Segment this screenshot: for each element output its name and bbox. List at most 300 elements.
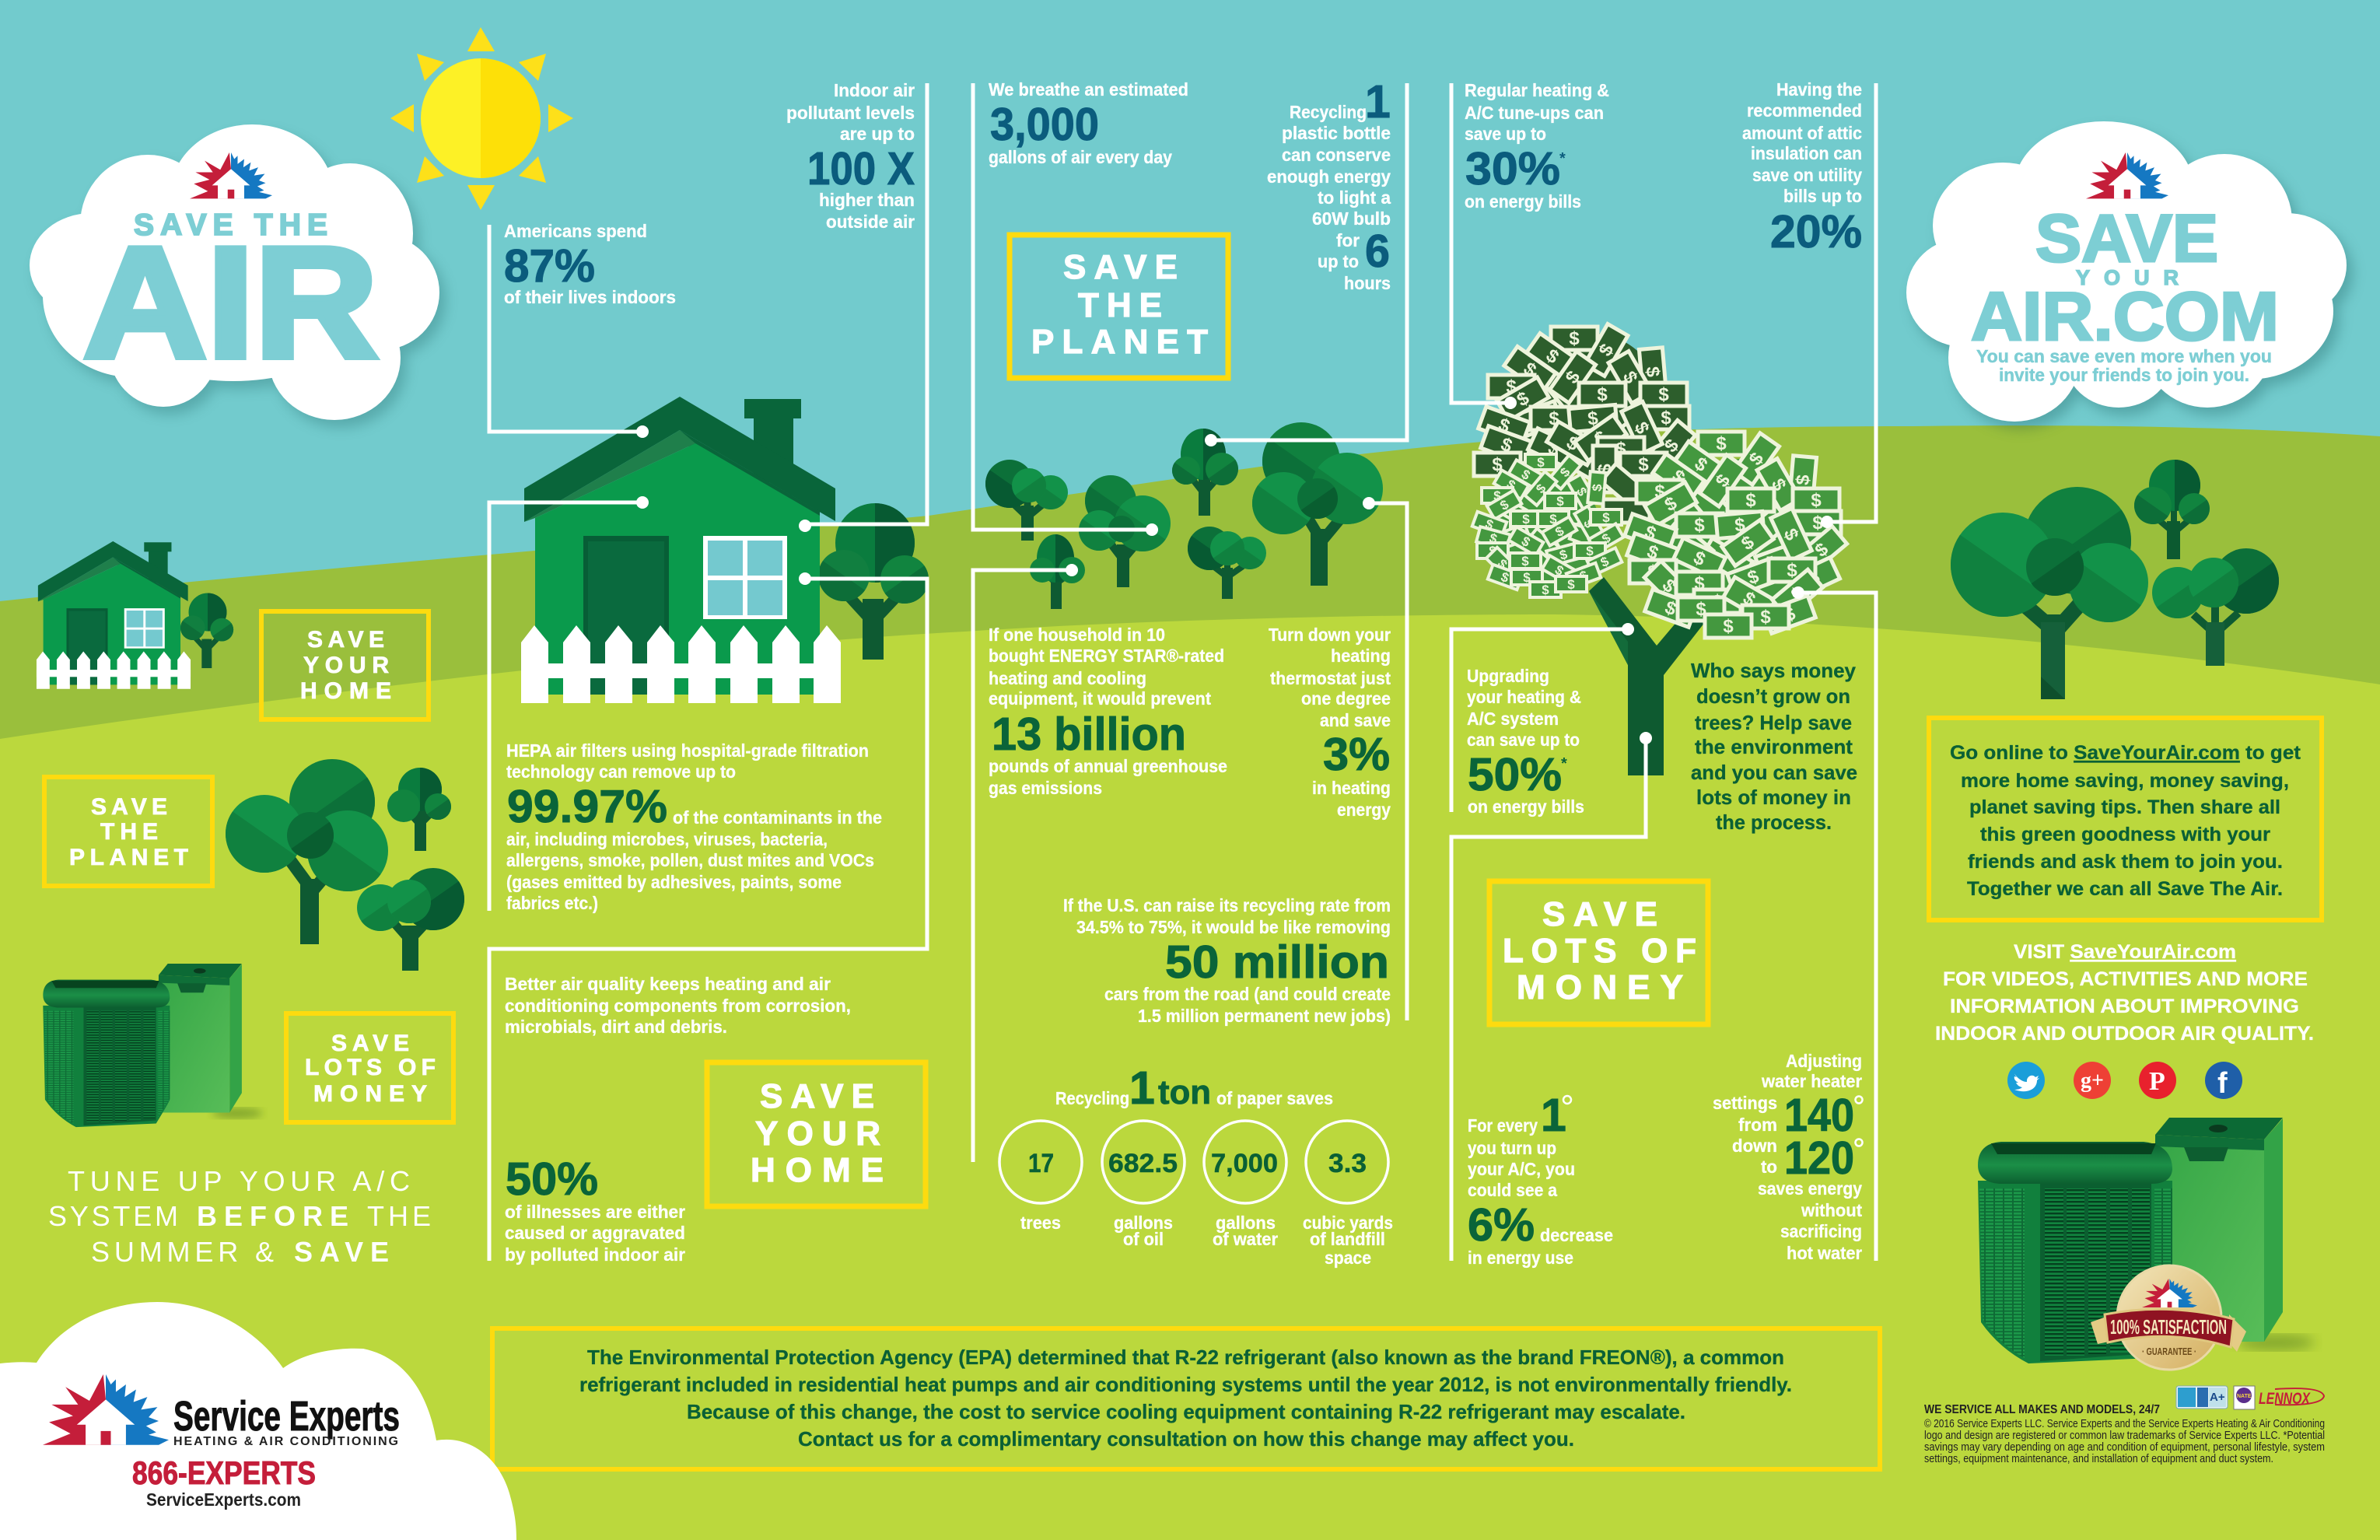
stat: tune-ups 30%: [1465, 80, 1609, 212]
box: save your home large: SAVE: [760, 1077, 874, 1115]
light bills large: $: [1760, 607, 1771, 628]
stat: recycling 50 million: 50 million: [1165, 936, 1389, 988]
stat: thermostat 3%: Turn down your: [1269, 625, 1391, 645]
box: save the planet large: THE: [1078, 286, 1162, 324]
stat: energy star 13 billion: equipment, it would prevent: [989, 688, 1211, 709]
light bills small: $: [1504, 477, 1518, 493]
tree 5: [1179, 527, 1266, 599]
stat: tune-ups 30%: on energy bills: [1465, 191, 1581, 212]
stat: recycling 1 ton of paper: [999, 1062, 1393, 1268]
stat: water heater 140 to 120: saves energy: [1758, 1178, 1862, 1199]
text: who says money: Who says money: [1691, 659, 1857, 682]
stat: hepa 99.97%: allergens, smoke, pollen, dust mites and VOCs: [506, 850, 874, 870]
stat: attic insulation 20%: 20%: [1770, 206, 1862, 257]
small house tree: [176, 593, 238, 668]
light bills small: $: [1523, 570, 1531, 585]
stat: recycling 1 bottle: Recycling: [1290, 102, 1367, 122]
stat: thermostat 3%: thermostat just: [1270, 668, 1391, 688]
text: who says money: the environment: [1695, 735, 1853, 758]
circle: landfill: cubic yards: [1303, 1213, 1393, 1233]
light bills large: $: [1690, 453, 1711, 477]
text: who says money: lots of money in: [1696, 786, 1851, 809]
light bills small: $: [1493, 488, 1501, 503]
stat: tune-ups 30%: save up to: [1465, 124, 1546, 144]
stat: thermostat 3%: in heating: [1312, 778, 1391, 798]
legal text: settings, equipment maintenance, and installation of equipment and duct system.: [1924, 1452, 2273, 1465]
light bills large: $: [1804, 566, 1824, 590]
light bills large: $: [1712, 591, 1723, 612]
stat: water heater 140 to 120: to: [1761, 1157, 1777, 1177]
lower left tree: [357, 868, 477, 971]
box: save the planet small: THE: [100, 819, 158, 845]
dark bills: $: [1661, 408, 1671, 429]
stat: 3,000 gallons: 3,000: [990, 99, 1099, 150]
light bills large: $: [1739, 587, 1759, 611]
light bills large: $: [1716, 433, 1727, 454]
box: save lots of money small: LOTS OF: [305, 1055, 436, 1080]
light bills large: $: [1712, 471, 1735, 492]
legal text: WE SERVICE ALL MAKES AND MODELS, 24/7: [1924, 1403, 2160, 1416]
light bills large: $: [1644, 541, 1661, 565]
tree 4: [1030, 534, 1085, 609]
stat: tune-ups 30%: Regular heating &: [1465, 80, 1609, 100]
epa notice box: Contact us for a complimentary consultation on how this change may affect you.: [798, 1427, 1574, 1451]
stat: tune-ups 30%: A/C tune-ups can: [1465, 103, 1604, 123]
stat: 1 degree 6%: in energy use: [1468, 1248, 1573, 1268]
text: who says money: [1691, 659, 1857, 834]
circle: landfill: space: [1325, 1248, 1371, 1268]
heading: air: AIR: [83, 215, 378, 391]
text: better air quality: microbials, dirt and debris.: [505, 1017, 727, 1037]
panel: go online: friends and ask them to join you.: [1968, 851, 2283, 873]
light bills large: [1625, 432, 1847, 638]
satisfaction guarantee seal: 100% SATISFACTION: [2110, 1315, 2227, 1339]
circle: water: [1204, 1121, 1286, 1249]
stat: recycling 1 bottle: 6: [1365, 226, 1390, 277]
tree 3: [1167, 429, 1244, 516]
heading: your: YOUR: [2076, 266, 2179, 289]
stat: water heater 140 to 120: 120: [1784, 1132, 1854, 1184]
icon: facebook: f: [2217, 1067, 2228, 1100]
box: save your home small: [261, 611, 429, 719]
right lower tree: [2152, 548, 2291, 666]
stat: 3,000 gallons: [989, 79, 1188, 167]
stat: hepa 99.97%: (gases emitted by adhesives, paints, some: [506, 872, 842, 892]
stat: americans 87%: 87%: [504, 240, 595, 292]
epa notice box: The Environmental Protection Agency (EPA) determined that R-22 refrigerant (also known as the brand FREON®), a common: [587, 1346, 1784, 1369]
panel: go online: Go online to SaveYourAir.com to get: [1950, 742, 2301, 764]
stat: recycling 1 bottle: to light a: [1318, 187, 1391, 208]
cloud: service experts logo: [0, 1302, 516, 1540]
stat: recycling 1 bottle: enough energy: [1267, 166, 1391, 187]
stat: illnesses 50%: 50%: [506, 1153, 598, 1205]
trunk: [1589, 577, 1716, 775]
stat: indoor air pollutants 100x: are up to: [840, 124, 915, 144]
icon: facebook: [2205, 1062, 2242, 1100]
stat: tune-ups 30%: *: [1559, 150, 1566, 167]
stat: 1 degree 6%: 6%: [1468, 1199, 1535, 1251]
text: better air quality: [505, 974, 851, 1037]
light bills large: $: [1745, 449, 1769, 470]
stat: thermostat 3%: and save: [1320, 710, 1391, 730]
money tree: [1472, 324, 1847, 775]
icon: pinterest: P: [2149, 1067, 2165, 1096]
light bills large: $: [1779, 525, 1803, 544]
cloud caption: [1976, 346, 2272, 385]
dark bills: $: [1658, 384, 1669, 405]
stat: upgrading 50%: Upgrading: [1467, 666, 1549, 686]
stat: 1 degree 6%: could see a: [1468, 1180, 1557, 1200]
text: visit saveyourair: INFORMATION ABOUT IMPROVING: [1950, 996, 2299, 1017]
dark bills: $: [1506, 376, 1517, 397]
light bills small: $: [1533, 481, 1549, 496]
stat: recycling 50 million: If the U.S. can raise its recycling rate from: [1063, 895, 1391, 915]
light bills large: $: [1694, 515, 1705, 536]
text: tune up your ac: SYSTEM: [48, 1200, 178, 1232]
light bills large: $: [1661, 492, 1681, 516]
dark bills: $: [1569, 328, 1580, 349]
stat: energy star 13 billion: [989, 625, 1227, 798]
cloud caption: You can save even more when you: [1976, 346, 2272, 366]
light bills large: $: [1812, 513, 1823, 534]
stat: upgrading 50%: A/C system: [1467, 709, 1559, 729]
light bills small: $: [1573, 485, 1590, 499]
box: save your home large: [707, 1062, 926, 1206]
stat: attic insulation 20%: insulation can: [1751, 143, 1862, 163]
tagline: HEATING & AIR CONDITIONING: [173, 1435, 398, 1448]
heading: [1055, 1062, 1333, 1114]
stat: indoor air pollutants 100x: outside air: [826, 212, 915, 232]
light bills large: $: [1694, 573, 1705, 594]
stat: indoor air pollutants 100x: higher than: [819, 190, 915, 210]
tree 6 large: [1240, 422, 1383, 586]
stat: attic insulation 20%: recommended: [1747, 100, 1862, 121]
stat: illnesses 50%: caused or aggravated: [505, 1223, 685, 1243]
light bills large: $: [1745, 565, 1762, 589]
front hill: [0, 614, 2380, 1540]
light bills large: $: [1734, 514, 1747, 537]
circle: trees: [999, 1121, 1082, 1233]
box: save lots of money large: LOTS OF: [1503, 932, 1696, 970]
text: tune up your ac: SAVE: [294, 1236, 389, 1268]
dark bills: $: [1562, 367, 1585, 388]
stat: energy star 13 billion: pounds of annual greenhouse: [989, 756, 1227, 776]
dark bills: $: [1492, 454, 1503, 475]
stat: 3,000 gallons: gallons of air every day: [989, 147, 1172, 167]
light bills large: $: [1657, 575, 1680, 597]
stat: recycling 1 bottle: up to: [1318, 251, 1359, 271]
dark bills: $: [1545, 437, 1563, 461]
stat: recycling 50 million: [1063, 895, 1391, 1026]
epa notice box: [492, 1328, 1880, 1469]
text: visit saveyourair: INDOOR AND OUTDOOR AIR QUALITY.: [1935, 1023, 2314, 1045]
stat: water heater 140 to 120: sacrificing: [1780, 1221, 1862, 1241]
stat: 1 degree 6%: [1468, 1090, 1613, 1268]
stat: indoor air pollutants 100x: Indoor air: [834, 80, 915, 100]
text: visit saveyourair: [1935, 941, 2314, 1045]
text: tune up your ac: TUNE UP YOUR A/C: [68, 1165, 410, 1197]
cloud shape: [0, 1302, 516, 1540]
stat: attic insulation 20%: Having the: [1776, 79, 1862, 100]
stat: recycling 1 bottle: 1: [1365, 76, 1391, 128]
box: save the planet small: SAVE: [91, 794, 167, 820]
stat: 1 degree 6%: decrease: [1540, 1225, 1613, 1245]
dark bills: $: [1498, 433, 1515, 457]
panel: go online: Together we can all Save The Air.: [1967, 878, 2283, 900]
stat: water heater 140 to 120: Adjusting: [1786, 1051, 1862, 1071]
heading: ton: [1158, 1073, 1211, 1111]
satisfaction guarantee seal: [2091, 1265, 2246, 1370]
light bills small: $: [1522, 512, 1530, 527]
satisfaction guarantee seal: · GUARANTEE ·: [2142, 1346, 2196, 1357]
text: tune up your ac: SUMMER &: [91, 1236, 274, 1268]
stat: tune-ups 30%: 30%: [1465, 143, 1560, 194]
stat: water heater 140 to 120: without: [1801, 1200, 1862, 1220]
stat: illnesses 50%: of illnesses are either: [505, 1202, 685, 1222]
stat: 1 degree 6%: you turn up: [1468, 1138, 1556, 1158]
dark bills: $: [1496, 414, 1513, 438]
stat: energy star 13 billion: If one household in 10: [989, 625, 1165, 645]
right trees group: [1930, 460, 2291, 699]
light bills small: $: [1542, 583, 1549, 597]
text: who says money: doesn’t grow on: [1696, 684, 1850, 708]
stat: thermostat 3%: 3%: [1323, 729, 1390, 780]
light bills small: $: [1483, 516, 1496, 533]
stat: energy star 13 billion: heating and cooling: [989, 668, 1146, 688]
circle: landfill: [1303, 1121, 1393, 1268]
light bills large: $: [1787, 560, 1797, 581]
icon: google plus: [2074, 1062, 2111, 1099]
text: who says money: the process.: [1716, 810, 1832, 834]
heading: save: SAVE: [2035, 201, 2218, 276]
light bills small: $: [1557, 464, 1573, 480]
dark bills: $: [1619, 368, 1642, 387]
phone: 866-EXPERTS: [132, 1454, 316, 1491]
text: better air quality: conditioning components from corrosion,: [505, 996, 851, 1016]
circle: water: of water: [1213, 1229, 1278, 1249]
cloud: save your air com: [1906, 121, 2347, 422]
box: save the planet small: PLANET: [69, 845, 188, 870]
icon: twitter: [2007, 1062, 2045, 1099]
stat: hepa 99.97%: fabrics etc.): [506, 893, 598, 913]
dark bills: $: [1594, 340, 1619, 360]
light bills small: $: [1549, 512, 1557, 527]
light bills small: $: [1519, 534, 1533, 550]
box: save the planet large: [1010, 235, 1228, 378]
heading: of paper saves: [1216, 1088, 1333, 1108]
circle: oil: 682.5: [1108, 1149, 1178, 1178]
dark bills: $: [1661, 435, 1683, 457]
stat: energy star 13 billion: gas emissions: [989, 778, 1102, 798]
stat: upgrading 50%: [1467, 666, 1584, 817]
stat: upgrading 50%: your heating &: [1467, 687, 1581, 707]
stat: hepa 99.97%: HEPA air filters using hospital-grade filtration: [506, 740, 869, 761]
light bills large: $: [1690, 547, 1709, 571]
dark bills: $: [1587, 408, 1600, 430]
box: save the planet large: SAVE: [1063, 248, 1178, 286]
circle: oil: of oil: [1123, 1229, 1164, 1249]
text: who says money: trees? Help save: [1695, 711, 1852, 734]
stat: energy star 13 billion: 13 billion: [992, 709, 1186, 760]
light bills small: $: [1488, 530, 1499, 547]
cloud: save the air: [30, 124, 439, 420]
light bills large: $: [1662, 597, 1679, 621]
stat: recycling 1 bottle: plastic bottle: [1282, 123, 1391, 143]
right small tree: [2127, 460, 2216, 559]
light bills large: $: [1668, 466, 1689, 489]
stat: americans 87%: of their lives indoors: [504, 287, 676, 307]
stat: americans 87%: Americans spend: [504, 221, 647, 241]
company name: Service Experts: [173, 1393, 400, 1440]
text: who says money: and you can save: [1691, 761, 1857, 784]
light bills small: $: [1580, 516, 1597, 531]
middle trees group: [976, 422, 1383, 609]
stat: water heater 140 to 120: down: [1732, 1136, 1777, 1156]
stat: americans 87%: [504, 221, 676, 307]
stat: energy star 13 billion: bought ENERGY STAR®-rated: [989, 646, 1224, 666]
light bills small: $: [1590, 483, 1605, 492]
stat: indoor air pollutants 100x: [786, 80, 915, 232]
stat: attic insulation 20%: [1742, 79, 1862, 257]
badge: lennox: LENNOX: [2259, 1390, 2311, 1408]
box: save your home small: SAVE: [307, 627, 384, 653]
light bills small: $: [1599, 530, 1614, 547]
dark bills: $: [1615, 439, 1626, 460]
logo mark: [43, 1374, 169, 1445]
stat: hepa 99.97%: technology can remove up to: [506, 761, 736, 782]
light bills large: $: [1738, 531, 1759, 555]
product: large ac units: [1978, 1118, 2315, 1363]
legal text: [1924, 1403, 2325, 1465]
stat: illnesses 50%: [505, 1153, 685, 1265]
dark bills: $: [1549, 408, 1559, 429]
stat: upgrading 50%: *: [1561, 755, 1567, 772]
stat: recycling 1 bottle: hours: [1344, 273, 1391, 293]
epa notice box: Because of this change, the cost to service cooling equipment containing R-22 refrigerant may escalate.: [687, 1400, 1685, 1423]
icon: sun: [390, 27, 573, 210]
box: save your home small: HOME: [300, 678, 391, 704]
stat: attic insulation 20%: bills up to: [1783, 186, 1862, 206]
social icons: [2007, 1062, 2242, 1100]
dark bills: $: [1629, 418, 1654, 438]
text: tune up your ac: [48, 1165, 431, 1268]
heading: air.com: AIR.COM: [1971, 278, 2279, 355]
badge: energy star and bbb: [2176, 1386, 2228, 1409]
box: save the planet small: [44, 777, 212, 886]
stat: thermostat 3%: energy: [1337, 800, 1391, 820]
big house building: [521, 397, 841, 703]
dark bills: $: [1519, 359, 1540, 382]
heading: Recycling: [1055, 1088, 1129, 1108]
light bills small: $: [1552, 523, 1567, 540]
left trees group: [210, 759, 477, 971]
dark bills: $: [1641, 366, 1664, 379]
dark bills: $: [1514, 387, 1533, 411]
stat: attic insulation 20%: save on utility: [1752, 165, 1862, 185]
badges: [2176, 1386, 2324, 1409]
text: tune up your ac: BEFORE: [197, 1200, 348, 1232]
box: save your home large: HOME: [751, 1151, 884, 1189]
tree 2: [1071, 475, 1171, 587]
light bills small: $: [1558, 547, 1570, 563]
connector lines and dots: [489, 83, 1876, 1261]
stat: thermostat 3%: heating: [1331, 646, 1391, 666]
badge: nate: [2234, 1386, 2255, 1409]
stat: recycling 50 million: cars from the road (and could create: [1104, 984, 1391, 1004]
cloud caption: invite your friends to join you.: [1999, 365, 2249, 385]
product: small ac units: [43, 964, 263, 1127]
circle: oil: [1102, 1121, 1185, 1249]
light bills large: $: [1647, 562, 1658, 583]
light bills small: $: [1489, 544, 1496, 558]
stat: recycling 1 bottle: [1267, 76, 1391, 293]
light bills large: $: [1767, 475, 1790, 495]
circle: trees: trees: [1020, 1213, 1061, 1233]
box: save lots of money large: [1489, 881, 1708, 1024]
dark bills: $: [1597, 384, 1608, 405]
small house: [37, 541, 191, 689]
stat: 1 degree 6%: For every: [1468, 1115, 1538, 1136]
stat: thermostat 3%: [1269, 625, 1391, 820]
legal text: savings may vary depending on age and condition of equipment, personal lifestyle, system: [1924, 1440, 2325, 1454]
heading: save the: SAVE THE: [134, 208, 327, 242]
stat: upgrading 50%: 50%: [1468, 749, 1562, 800]
logo mark: [2086, 152, 2168, 198]
stat: water heater 140 to 120: 140: [1784, 1090, 1854, 1141]
stat: water heater 140 to 120: hot water: [1787, 1243, 1862, 1263]
circle: water: 7,000: [1211, 1149, 1278, 1178]
light bills small: $: [1556, 494, 1564, 509]
circle: landfill: 3.3: [1328, 1149, 1367, 1178]
box: save lots of money large: MONEY: [1517, 968, 1683, 1006]
icon: pinterest: [2139, 1062, 2176, 1099]
stat: water heater 140 to 120: settings: [1713, 1093, 1777, 1113]
small left tree: [387, 768, 457, 851]
circle: water: gallons: [1216, 1213, 1276, 1233]
light bills large: $: [1642, 521, 1659, 545]
text: visit saveyourair: VISIT SaveYourAir.com: [2014, 941, 2236, 963]
light bills small: $: [1521, 554, 1529, 569]
stat: recycling 1 bottle: can conserve: [1282, 145, 1391, 165]
dark bills: $: [1563, 432, 1583, 456]
stat: hepa 99.97%: 99.97%: [507, 781, 667, 832]
light bills large: $: [1787, 582, 1809, 605]
light bills large: $: [1654, 481, 1665, 502]
circle: trees: 17: [1028, 1149, 1054, 1178]
light bills small: $: [1602, 510, 1610, 525]
stat: recycling 50 million: 34.5% to 75%, it would be like removing: [1076, 917, 1391, 937]
light bills small: $: [1499, 569, 1511, 586]
light bills small: $: [1567, 577, 1575, 592]
text: better air quality: Better air quality keeps heating and air: [505, 974, 831, 994]
stat: 1 degree 6%: 1: [1541, 1090, 1566, 1141]
stat: water heater 140 to 120: [1713, 1051, 1862, 1263]
dark bills: $: [1594, 464, 1615, 474]
stat: illnesses 50%: by polluted indoor air: [505, 1244, 685, 1265]
light bills large: $: [1811, 490, 1822, 511]
light bills small: $: [1537, 455, 1545, 470]
light bills small: $: [1598, 554, 1612, 570]
big house tree: [808, 503, 938, 660]
right large tree: [1930, 487, 2152, 699]
panel: go online: planet saving tips. Then share all: [1969, 796, 2280, 818]
box: save your home small: YOUR: [303, 653, 389, 678]
panel: go online: [1929, 718, 2322, 920]
light bills small: $: [1519, 467, 1533, 483]
circle: oil: gallons: [1114, 1213, 1173, 1233]
stat: water heater 140 to 120: water heater: [1761, 1071, 1862, 1091]
epa notice box: refrigerant included in residential heat pumps and air conditioning systems until the year 2012, is not environmentally friendly.: [579, 1373, 1792, 1396]
